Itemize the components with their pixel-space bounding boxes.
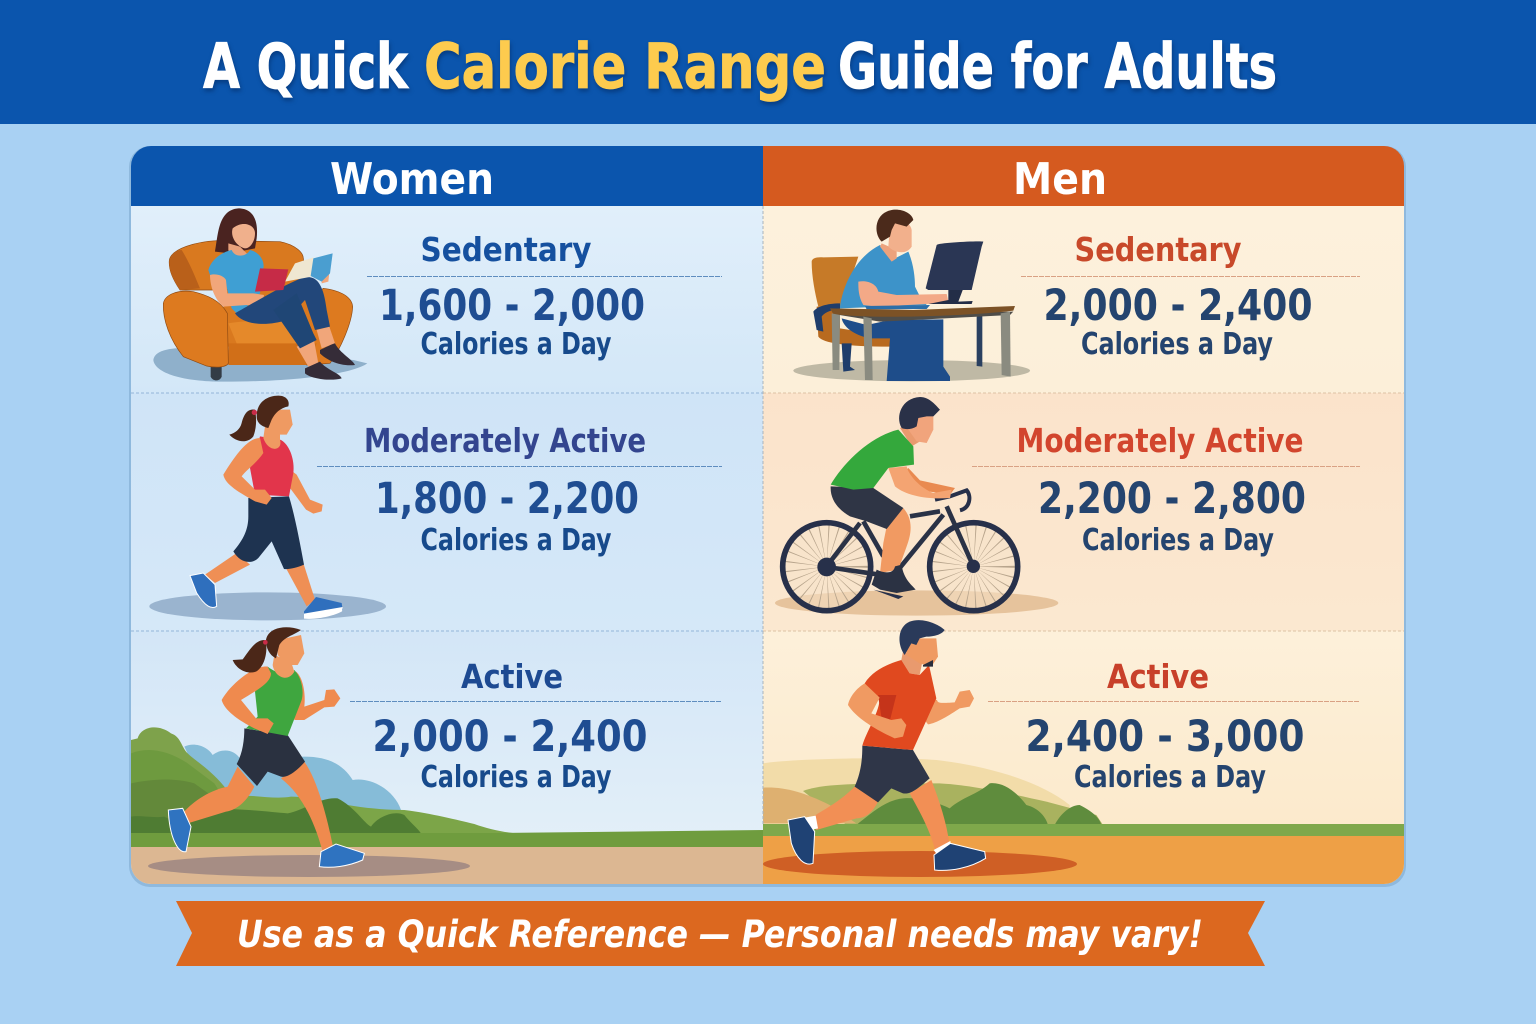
men moderately active text — [972, 421, 1360, 558]
card shadow — [129, 146, 1406, 887]
men sedentary text: Sedentary — [1074, 230, 1242, 269]
women active text — [350, 657, 722, 795]
women sedentary text: 1,600 - 2,000 — [379, 281, 645, 331]
footer note: Use as a Quick Reference — Personal needs may vary! — [237, 913, 1203, 956]
men active text — [988, 657, 1360, 795]
panel: women backgrounds — [131, 206, 763, 884]
women moderately active text: 1,800 - 2,200 — [375, 474, 639, 524]
footer ribbon — [176, 901, 1265, 966]
illustration: woman walking — [149, 396, 386, 620]
men moderately active text: Calories a Day — [1082, 523, 1274, 558]
men sedentary text: 2,000 - 2,400 — [1044, 281, 1312, 331]
women heading: Women — [330, 154, 494, 205]
women sedentary text — [367, 230, 722, 362]
women sedentary text: Sedentary — [420, 230, 592, 269]
men moderately active text: 2,200 - 2,800 — [1038, 474, 1306, 524]
men active text: Calories a Day — [1074, 760, 1266, 795]
title banner — [0, 0, 1536, 124]
illustration: man running — [788, 620, 986, 870]
men sedentary text — [1021, 230, 1360, 362]
men sedentary text: Calories a Day — [1081, 327, 1273, 362]
panel: men backgrounds — [763, 206, 1404, 884]
panel: comparison card — [131, 146, 1404, 884]
women active text: Active — [461, 657, 563, 696]
row dividers — [131, 206, 1404, 824]
men column header — [763, 146, 1404, 206]
men heading: Men — [1013, 154, 1107, 205]
illustration: woman running — [168, 627, 364, 867]
women moderately active text: Moderately Active — [364, 421, 646, 460]
women column header — [131, 146, 763, 206]
illustration: woman reading in armchair — [153, 208, 367, 382]
title: A Quick — [203, 30, 410, 103]
women moderately active text — [317, 421, 722, 558]
illustration: man on bicycle — [775, 397, 1058, 616]
men active text: 2,400 - 3,000 — [1026, 712, 1304, 762]
scenery: park for women active row — [131, 727, 763, 884]
women moderately active text: Calories a Day — [420, 523, 612, 558]
men moderately active text: Moderately Active — [1016, 421, 1304, 460]
women active text: Calories a Day — [420, 760, 612, 795]
title — [203, 30, 1277, 103]
men active text: Active — [1107, 657, 1209, 696]
scenery: path for men active row — [763, 758, 1404, 884]
title: Calorie Range — [424, 30, 826, 103]
women active text: 2,000 - 2,400 — [372, 712, 648, 762]
women sedentary text: Calories a Day — [420, 327, 612, 362]
illustration: man at desk with computer — [793, 210, 1030, 381]
title: Guide for Adults — [838, 30, 1277, 103]
